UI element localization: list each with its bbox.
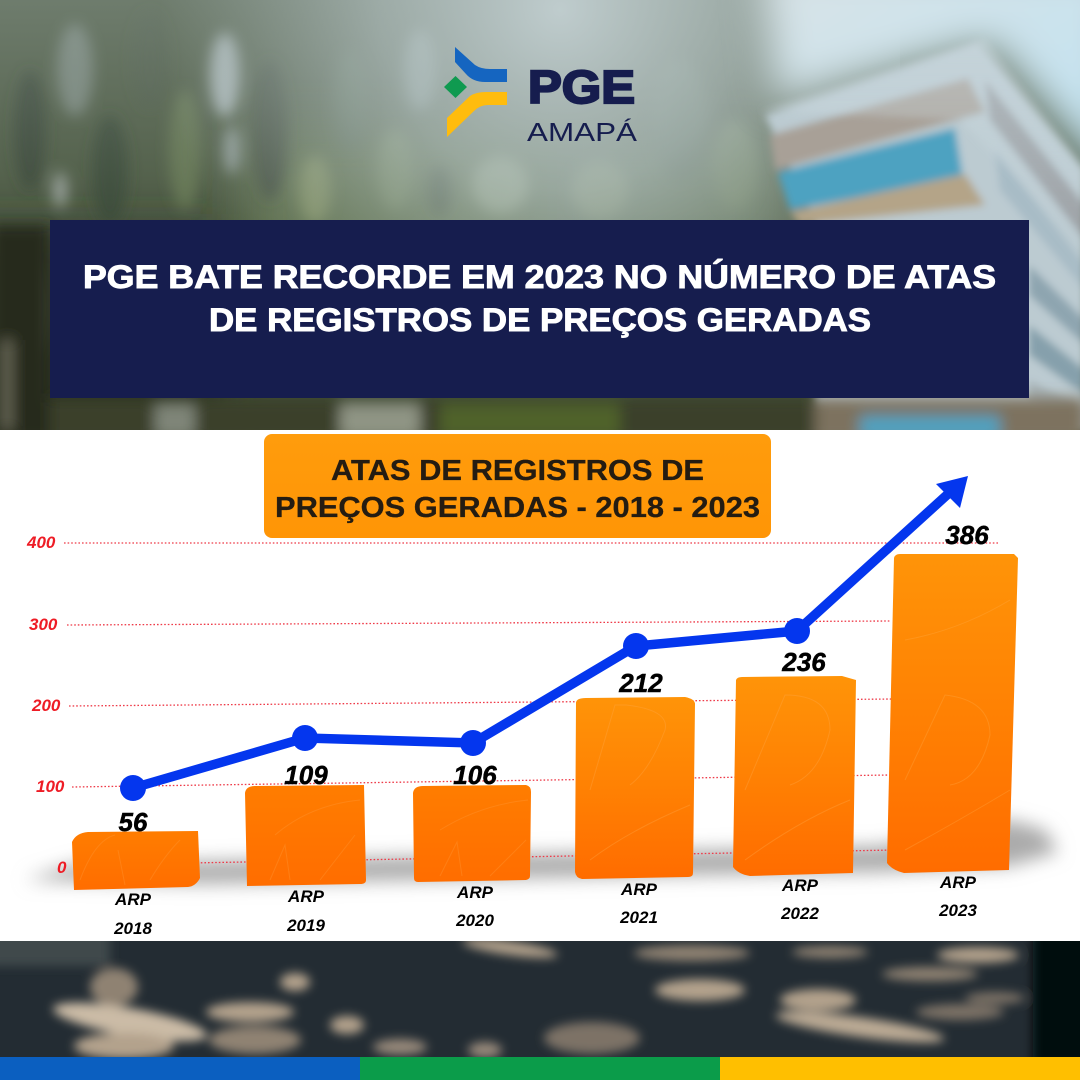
y axis labels	[26, 533, 67, 877]
footer colour strip	[0, 1057, 1080, 1080]
y axis labels: 400	[26, 533, 56, 552]
category labels: ARP	[114, 890, 152, 909]
chart heading line 1: ATAS DE REGISTROS DE	[331, 455, 704, 487]
blue trend line with arrow	[120, 476, 968, 801]
bar 2023	[887, 554, 1018, 873]
category labels: ARP	[781, 876, 819, 895]
title line 1: PGE BATE RECORDE EM 2023 NO NÚMERO DE ATAS	[83, 259, 996, 295]
background photo: shaded ground	[0, 941, 1080, 1057]
category labels: 2020	[455, 911, 494, 930]
title line 2: DE REGISTROS DE PREÇOS GERADAS	[209, 302, 871, 338]
logo wordmark: PGE: PGE	[528, 61, 635, 113]
logo: PGE Amapá	[444, 47, 638, 147]
category labels: ARP	[620, 880, 658, 899]
y axis labels: 100	[36, 777, 65, 796]
category labels: ARP	[456, 883, 494, 902]
building	[765, 42, 1080, 430]
category labels: 2021	[619, 908, 658, 927]
category labels: ARP	[939, 873, 977, 892]
logo wordmark: AMAPÁ: AMAPÁ	[527, 117, 638, 147]
bar 2022	[733, 676, 856, 876]
lower foreground	[0, 225, 1080, 442]
icon: green diamond	[444, 76, 467, 98]
category labels: 2022	[780, 904, 819, 923]
background photo: trees and building	[0, 0, 1080, 450]
bar value labels: 106	[453, 760, 497, 790]
category labels: 2023	[938, 901, 977, 920]
bars	[72, 554, 1018, 890]
bar value labels	[119, 520, 989, 837]
y axis labels: 300	[29, 615, 58, 634]
chart heading badge	[264, 434, 771, 538]
bar 2018	[72, 831, 200, 890]
bar value labels: 212	[618, 668, 663, 698]
panel: bar chart card	[0, 430, 1080, 941]
bar value labels: 386	[945, 520, 989, 550]
chart heading line 2: PREÇOS GERADAS - 2018 - 2023	[275, 492, 760, 524]
bar 2019	[245, 785, 366, 886]
y axis labels: 200	[31, 696, 61, 715]
bar 2020	[413, 785, 531, 882]
category labels: 2018	[113, 919, 152, 938]
chart gridlines	[64, 543, 998, 863]
sky	[760, 0, 1080, 190]
title panel	[50, 220, 1029, 398]
floor shadow	[25, 820, 1058, 884]
bar value labels: 56	[119, 807, 148, 837]
bar value labels: 236	[781, 647, 826, 677]
bar 2021	[575, 697, 695, 879]
bar value labels: 109	[284, 760, 328, 790]
tree foliage texture	[14, 22, 750, 220]
fog over building top	[770, 41, 1080, 214]
y axis labels: 0	[57, 858, 67, 877]
icon: yellow arrow stripe	[447, 92, 507, 137]
category labels: 2019	[286, 916, 325, 935]
category labels: ARP	[287, 887, 325, 906]
icon: blue arrow stripe	[455, 47, 507, 82]
category labels	[113, 873, 977, 938]
